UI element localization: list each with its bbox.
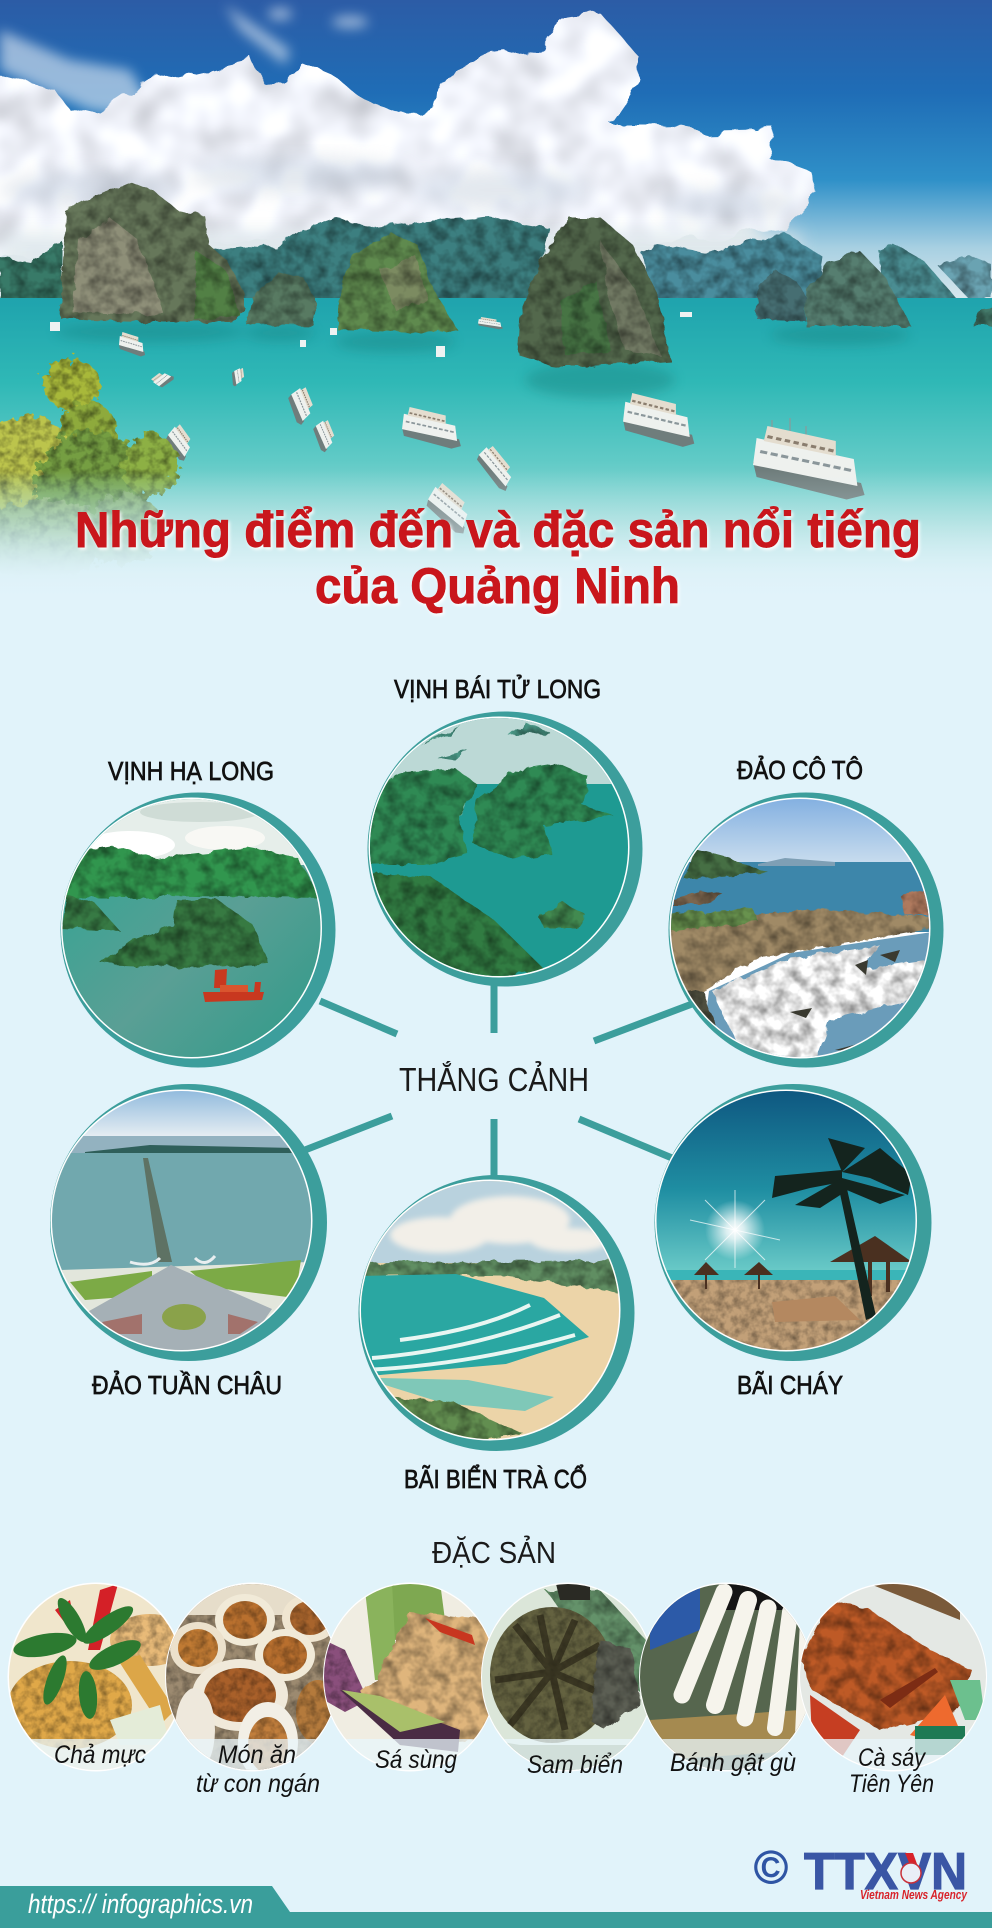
photo circle: Bai Chay — [654, 1084, 932, 1361]
section heading: specialties: ĐẶC SẢN — [432, 1535, 556, 1570]
food oval: clam dish — [165, 1582, 331, 1772]
location label: Dao Tuan Chau: ĐẢO TUẦN CHÂU — [92, 1370, 282, 1400]
foreground tree — [0, 359, 178, 580]
food oval: Banh gat gu — [639, 1582, 806, 1772]
distant karst ranges — [0, 216, 992, 298]
hero photo: Ha Long Bay panorama — [0, 0, 992, 620]
karst islands — [60, 182, 992, 367]
food label: Ca say Tien Yen — [849, 1744, 934, 1798]
location label: Dao Co To: ĐẢO CÔ TÔ — [737, 755, 863, 785]
food label: Mon an tu con ngan: Món ăn — [218, 1741, 296, 1769]
photo circle: Ha Long Bay — [60, 792, 336, 1068]
food label: Sa sung: Sá sùng — [375, 1746, 457, 1774]
title: Những điểm đến và đặc sản nổi tiếng — [75, 502, 921, 558]
food label: Mon an tu con ngan — [196, 1741, 320, 1798]
tour boats — [50, 312, 865, 536]
title — [75, 502, 921, 614]
centre label: scenic spots: THẮNG CẢNH — [399, 1061, 589, 1098]
fade into page background — [0, 476, 992, 588]
footer URL: https:// infographics.vn — [28, 1889, 253, 1919]
food label: Cha muc: Chả mực — [54, 1741, 146, 1769]
food label: Ca say Tien Yen: Cà sáy — [858, 1744, 926, 1772]
location label: Bai Chay: BÃI CHÁY — [737, 1370, 843, 1400]
photo circle: Bai Tu Long Bay — [365, 712, 642, 986]
food label: Sam bien: Sam biển — [527, 1751, 623, 1779]
footer bar — [0, 1886, 992, 1928]
food oval: Cha muc — [8, 1582, 174, 1772]
copyright symbol: © — [754, 1841, 788, 1893]
sea — [0, 298, 992, 564]
food oval: Sa sung — [323, 1582, 489, 1772]
title: của Quảng Ninh — [315, 558, 680, 614]
photo circle: Co To Island — [668, 792, 944, 1068]
wispy high clouds — [0, 5, 368, 120]
location label: Vinh Bai Tu Long: VỊNH BÁI TỬ LONG — [394, 673, 601, 704]
location label: Bai Bien Tra Co: BÃI BIỂN TRÀ CỔ — [404, 1464, 587, 1494]
TTXVN logo: TTXVN — [804, 1843, 967, 1901]
food label: Mon an tu con ngan: từ con ngán — [196, 1770, 320, 1798]
food oval: Sam bien — [481, 1582, 647, 1772]
photo circle: Tra Co Beach — [358, 1175, 634, 1451]
location label: Vinh Ha Long: VỊNH HẠ LONG — [108, 756, 274, 786]
photo circle: Tuan Chau Island — [50, 1084, 327, 1361]
food oval: Ca say Tien Yen — [795, 1580, 990, 1775]
island reflections on the water — [55, 322, 910, 398]
cumulus clouds — [0, 14, 820, 310]
connector lines from centre label to photo circles — [305, 985, 692, 1178]
sky — [0, 0, 992, 310]
food label: Ca say Tien Yen: Tiên Yên — [849, 1770, 934, 1798]
food label: Banh gat gu: Bánh gật gù — [670, 1749, 796, 1777]
